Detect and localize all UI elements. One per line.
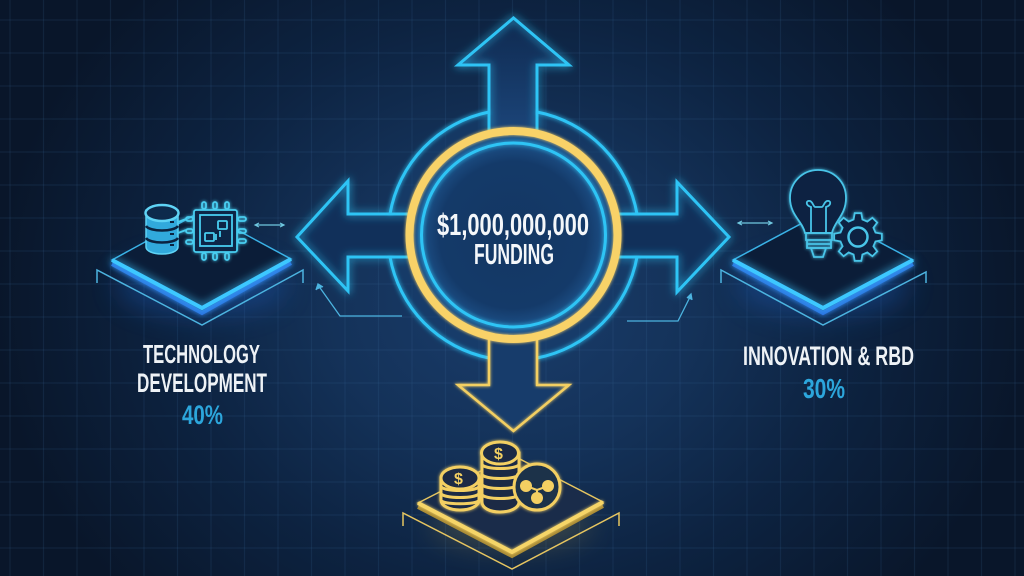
value: 40%: 40% [182,400,223,430]
crypto coin [514,464,560,510]
bottom platform [403,455,619,569]
connector arrow: right [627,294,692,321]
arrow: up [458,18,569,130]
arrow: down [458,340,569,431]
small double arrow: right [738,221,772,225]
icon: light bulb [790,170,846,257]
small stack: $ [454,471,463,488]
central funding circle [410,131,618,339]
outer cyan ring [390,112,637,358]
icon: microchip [178,202,246,260]
icon: database [146,205,178,254]
label: technology development [137,339,267,430]
funding amount: $1,000,000,000 [437,207,589,242]
gold ring [410,131,618,339]
arrow: right [618,182,729,292]
small double arrow: left [255,223,284,227]
right platform [721,212,926,325]
left platform [97,211,303,325]
value: 30%: 30% [803,373,845,404]
icon: gear [834,213,882,261]
label: technology development: TECHNOLOGY [143,339,260,369]
inner cyan ring [422,143,606,327]
label: technology development: DEVELOPMENT [137,368,267,398]
tall stack: $ [494,446,503,463]
outer ring backing disc [388,109,640,361]
icon: coin stacks [441,442,560,512]
arrow: left [297,181,410,291]
label: innovation [743,341,914,404]
label: innovation: INNOVATION & RBD [743,341,914,371]
funding label: FUNDING [474,239,554,271]
connector arrow: left [316,284,402,316]
